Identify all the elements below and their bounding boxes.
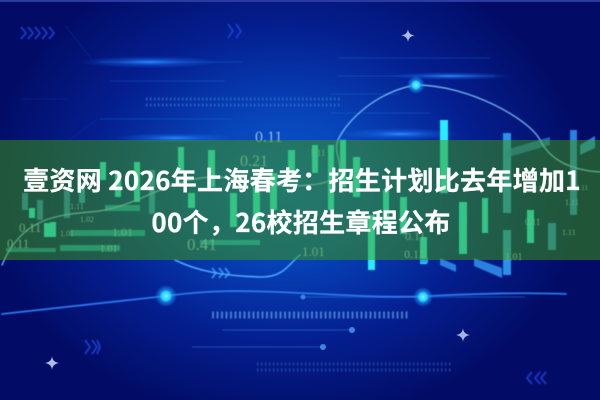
title band <box>0 140 600 260</box>
chart number labels: 1.11 <box>310 148 325 158</box>
chart number labels: 0.11 <box>19 220 41 235</box>
chart number labels: 1.02 <box>80 215 94 224</box>
chart number labels <box>7 129 588 263</box>
glowing nodes and sparkles <box>45 29 470 370</box>
chart number labels: 0.21 <box>240 153 268 170</box>
chart number labels: 1.11 <box>70 202 84 211</box>
icon: chevrons <box>21 24 546 384</box>
chart number labels: 0.11 <box>404 247 425 261</box>
chart number labels: 1.11 <box>565 198 579 207</box>
title line 1: 壹资网 2026年上海春考：招生计划比去年增加1 <box>23 161 581 198</box>
chart number labels: 0.11 <box>405 229 426 243</box>
chart number labels: 1.01 <box>100 244 118 255</box>
trend curves <box>2 85 600 314</box>
candlestick bars <box>6 120 595 278</box>
horizontal light streaks <box>22 25 525 347</box>
chart number labels: 1.01 <box>505 252 522 263</box>
dotted data rows <box>146 99 452 370</box>
chart number labels: 0.11 <box>255 129 282 146</box>
chart number labels: 0.41 <box>187 235 217 254</box>
chart number labels: 0.11 <box>7 236 29 251</box>
chart number labels: 1.11 <box>576 184 588 192</box>
chart number labels: 1.11 <box>562 228 576 237</box>
chart number labels: 0.11 <box>525 217 540 227</box>
chart number labels: 1.01 <box>112 225 133 239</box>
title line 2: 00个，26校招生章程公布 <box>151 203 451 240</box>
chart number labels: 0.11 <box>527 184 542 194</box>
chart number labels: 1.01 <box>302 244 325 259</box>
chart number labels: 1.01 <box>60 229 74 238</box>
